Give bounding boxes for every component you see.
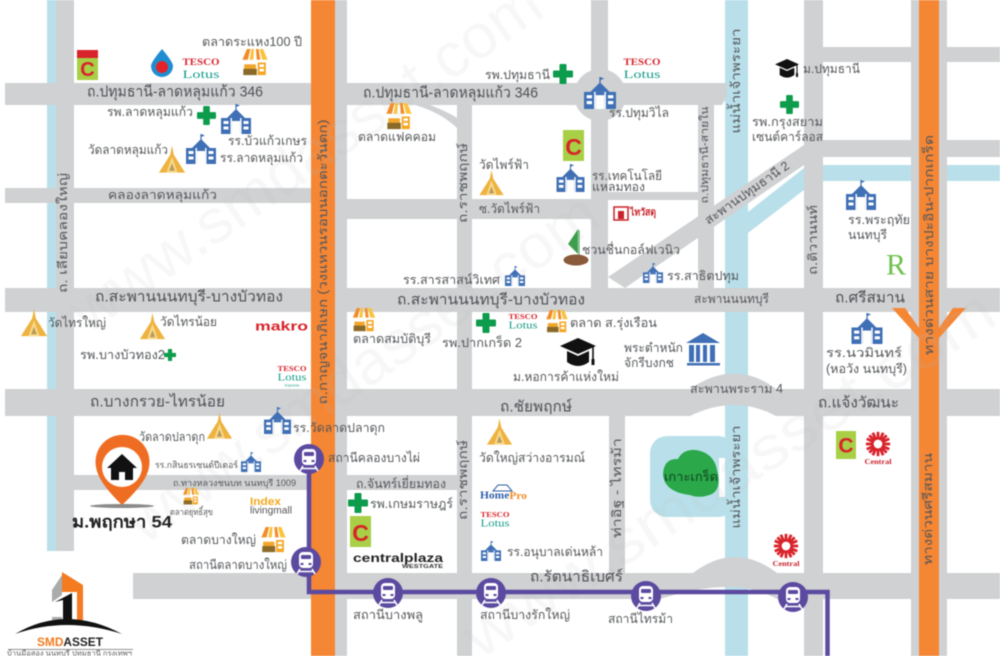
- label: Pathum Thani road west: ถ.ปทุมธานี-ลาดหลุมแก้ว 346: [87, 84, 263, 102]
- station: Bang Phlu: สถานีบางพลู: [353, 608, 423, 623]
- label: Bang Bua Thong road east: ถ.สะพานนนทบุรี-บางบัวทอง: [397, 292, 585, 310]
- Big C logo: C: [352, 520, 369, 546]
- market Yutthisuk: ตลาดยุทธิ์สุข: [170, 505, 213, 518]
- label: Chao Phraya lower vertical: แม่น้ำเจ้าพระยา: [726, 426, 743, 528]
- market 100 years: [202, 35, 302, 75]
- hospital Pak Kret 2: [442, 313, 522, 350]
- station: Sai Ma: [608, 581, 673, 626]
- school Pathum Wilai: [584, 77, 669, 121]
- Central logo: Central: [772, 560, 800, 568]
- market Rungruang: ตลาด ส.รุ่งเรือน: [570, 316, 657, 331]
- label: Bang Bua Thong road west: ถ.สะพานนนทบุรี-บางบัวทอง: [95, 288, 283, 306]
- school Satit Pathum: รร.สาธิตปทุม: [667, 269, 739, 284]
- royal residence Chakri Bongkot: [624, 333, 720, 370]
- Big C mini logo: C: [80, 59, 95, 81]
- hospital Pathum Thani: รพ.ปทุมธานี: [485, 68, 550, 83]
- Central logo: [772, 534, 800, 568]
- Big C logo: [350, 516, 371, 547]
- label: Chao Phraya upper vertical: แม่น้ำเจ้าพระยา: [726, 28, 743, 134]
- hospital Pathum Thani: [485, 64, 573, 84]
- hospital Kasemrad: [348, 493, 453, 513]
- market Sombat Buri: ตลาดสมบัติบุรี: [353, 332, 431, 347]
- school Sacred Heart Nonthaburi: [846, 180, 910, 243]
- landmarks: bottom left quadrant: [7, 407, 385, 656]
- temple Phrai Fa: [479, 158, 529, 195]
- label: Tha It Sai Ma vertical: ท่าอิฐ - ไทรม้า: [610, 438, 624, 538]
- school Nawamin: [826, 313, 907, 377]
- station: Bang Phlu: [353, 578, 423, 623]
- temple Sai Yai: [21, 309, 106, 336]
- temple Yai Sawang Arom: วัดใหญ่สว่างอารมณ์: [479, 451, 585, 465]
- label: canal Lat Lum Kaeo: คลองลาดหลุมแก้ว: [108, 188, 217, 203]
- project name: ม.พฤกษา 54: [72, 512, 173, 532]
- train stations: [189, 444, 808, 626]
- school Satit Pathum: [643, 263, 739, 284]
- golf course Chuan Chuen: [564, 229, 680, 266]
- school Wat Lat Pla Duk: [264, 407, 385, 436]
- school Sacred Heart Nonthaburi: นนทบุรี: [848, 228, 887, 243]
- temple Lat Pla Duk: วัดลาดปลาดุก: [139, 430, 205, 445]
- label: Si Saman road: ถ.ศรีสมาน: [835, 290, 905, 306]
- hospital Pak Kret 2: รพ.ปากเกร็ด 2: [442, 335, 522, 350]
- golf course Chuan Chuen: ชวนชื่นกอล์ฟเวนิว: [582, 241, 680, 257]
- station: Phra Nang Klao: [778, 582, 808, 612]
- Index Livingmall logo: Index: [250, 496, 282, 508]
- Tesco Lotus Express logo: Lotus: [278, 372, 307, 384]
- Robinson logo: R: [886, 248, 906, 282]
- royal residence Chakri Bongkot: พระตำหนัก: [624, 341, 683, 355]
- expressway: Bang Pa-in Pak Kret orange band with junction: [892, 0, 966, 656]
- Index Livingmall logo: livingmall: [250, 506, 292, 516]
- watermark: www.smdasset.com: www.smdasset.com: [113, 179, 612, 557]
- market Factory Mall: ตลาดแฟคคอม: [358, 130, 436, 144]
- Tesco Lotus Express logo: [508, 313, 538, 332]
- Big C logo: C: [838, 434, 854, 458]
- island: Koh Kret: [663, 450, 719, 497]
- landmarks: centre quadrant: [348, 57, 739, 570]
- HomePro logo: Home Pro: [480, 490, 527, 502]
- road labels: [56, 28, 936, 586]
- hospital Krung Siam St Carlos: รพ.กรุงสยาม: [752, 115, 823, 130]
- temple Yai Sawang Arom: [479, 418, 585, 465]
- market Factory Mall: [358, 103, 436, 144]
- Big C logo: [836, 431, 856, 459]
- hospital Krung Siam St Carlos: [752, 95, 823, 144]
- Tesco Lotus Express logo: Lotus: [480, 518, 510, 530]
- label: Chaeng Watthana road: ถ.แจ้งวัฒนะ: [818, 394, 899, 412]
- Tesco Lotus Express logo: [480, 511, 510, 530]
- temple Lat Lum Kaeo: วัดลาดหลุมแก้ว: [88, 143, 168, 158]
- school Pathum Wilai: รร.ปทุมวิไล: [609, 106, 669, 121]
- school Lat Lum Kaeo: รร.ลาดหลุมแก้ว: [220, 151, 303, 166]
- school Nawamin: รร.นวมินทร์: [826, 346, 902, 360]
- school Lat Lum Kaeo: [186, 134, 303, 166]
- school Kasintorn St Peter: รร.กสินธรเซนต์ปีเตอร์: [155, 459, 238, 470]
- label: Kanchanaphisek vertical: ถ.กาญจนาภิเษก (วงแหวนรอบนอกตะวันตก): [316, 120, 330, 404]
- new UTCC campus: ม.หอการค้าแห่งใหม่: [513, 370, 619, 384]
- school Bua Kaeo Kaset: รร.บัวแก้วเกษร: [228, 134, 307, 148]
- Tesco Lotus logo: Lotus: [624, 67, 661, 81]
- label: Tiwanon road vertical: ถ.ติวานนท์: [806, 205, 820, 275]
- market Bang Yai: ตลาดบางใหญ่: [181, 533, 256, 547]
- Index Livingmall logo: [250, 496, 292, 516]
- school Anuban Den La: [481, 541, 603, 561]
- SMD Asset logo: [7, 572, 133, 656]
- Tesco Lotus logo: [182, 57, 220, 81]
- Tesco Lotus Express logo: TESCO: [278, 365, 307, 373]
- PTT logo: [151, 49, 173, 77]
- Thai Watsadu logo: [613, 206, 657, 221]
- Tesco Lotus Express logo: TESCO: [508, 313, 538, 321]
- icon: museum: [686, 333, 720, 366]
- Tesco Lotus Express logo: Lotus: [508, 320, 538, 332]
- SMD Asset logo: SMDASSET: [37, 635, 104, 649]
- school Nawamin: (หอวัง นนทบุรี): [826, 362, 907, 377]
- school Sacred Heart Nonthaburi: รร.พระฤทัย: [848, 213, 910, 227]
- Central logo: [864, 432, 892, 466]
- school Sarasas Witaed: [403, 266, 525, 287]
- school Bua Kaeo Kaset: [221, 104, 307, 148]
- Tesco Lotus Express logo: [278, 365, 307, 388]
- station: Sai Ma: สถานีไทรม้า: [608, 612, 673, 626]
- label: Nonthaburi bridge: สะพานนนทบุรี: [694, 292, 769, 307]
- hospital Lat Lum Kaeo: [107, 105, 216, 125]
- school Kasintorn St Peter: [155, 452, 261, 472]
- label: Pathum Thani bridge 2 diagonal: สะพานปทุมธานี 2: [702, 159, 793, 228]
- label: Ratchaphruek lower vertical: ถ.ราชพฤกษ์: [456, 440, 470, 520]
- label: highway 1009: ถ.ทางหลวงชนบท นนทบุรี 1009: [173, 478, 296, 489]
- royal residence Chakri Bongkot: จักรีบงกช: [624, 356, 674, 370]
- temple Lat Pla Duk: [139, 412, 232, 445]
- station: Talat Bang Yai: สถานีตลาดบางใหญ่: [189, 558, 287, 572]
- label: Si Saman expressway vertical: ทางด่วนศรีสมาน: [921, 452, 935, 565]
- school Laem Thong: แหลมทอง: [592, 180, 645, 194]
- school Laem Thong: [556, 164, 662, 194]
- temple Sai Yai: วัดไทรใหญ่: [48, 316, 106, 330]
- label: Pathum Thani Sai Nai vertical: ถ.ปทุมธานี-สายใน: [698, 106, 711, 204]
- label: Chan Yiam Thong road: ถ.จันทร์เยี่ยมทอง: [356, 475, 446, 491]
- market Rungruang: [546, 310, 657, 332]
- station: Bang Rak Yai: [476, 578, 570, 622]
- Thai Watsadu logo: ไทวัสดุ: [629, 206, 656, 218]
- CentralPlaza Westgate logo: WESTGATE: [402, 564, 444, 570]
- island: Koh Kret: เกาะเกร็ด: [664, 469, 718, 484]
- school Wat Lat Pla Duk: รร.วัดลาดปลาดุก: [293, 421, 385, 436]
- market Bang Yai: [181, 527, 286, 552]
- CentralPlaza Westgate logo: centralplaza: [353, 551, 443, 565]
- label: Chaiyaphruek road: ถ.ชัยพฤกษ์: [500, 398, 572, 416]
- school Sarasas Witaed: รร.สารสาสน์วิเทศ: [403, 273, 500, 287]
- market Yutthisuk: [170, 488, 213, 518]
- landmarks: right side: [752, 59, 910, 568]
- label: Soi Wat Phrai Fa: ซ.วัดไพร์ฟ้า: [479, 202, 540, 216]
- market Sombat Buri: [353, 308, 431, 347]
- Central logo: Central: [864, 458, 892, 466]
- Tesco Lotus Express logo: Express: [285, 382, 299, 388]
- label: Ratanathibet road: ถ.รัตนาธิเบศร์: [530, 568, 623, 586]
- Tesco Lotus logo: TESCO: [624, 57, 660, 67]
- Tesco Lotus logo: [624, 57, 661, 81]
- hospital Lat Lum Kaeo: รพ.ลาดหลุมแก้ว: [107, 105, 193, 120]
- label: Pathum Thani road east: ถ.ปทุมธานี-ลาดหลุมแก้ว 346: [363, 84, 538, 102]
- expressway: Kanchanaphisek orange band: [311, 0, 335, 656]
- station: Talat Bang Yai: [189, 547, 321, 577]
- purple rail line: [309, 460, 828, 656]
- hospital Krung Siam St Carlos: เซนต์คาร์ลอส: [752, 130, 823, 144]
- station: Khlong Bang Phai: [294, 444, 420, 474]
- Pathum Thani University: [775, 59, 860, 78]
- hospital Kasemrad: รพ.เกษมราษฎร์: [370, 497, 453, 511]
- Pathum Thani University: ม.ปทุมธานี: [803, 62, 860, 77]
- temple Sai Noi: วัดไทรน้อย: [160, 315, 217, 329]
- label: Liap Khlong Yai road vertical: ถ. เลียบคลองใหญ่: [56, 173, 70, 293]
- school Anuban Den La: รร.อนุบาลเด่นหล้า: [507, 545, 603, 560]
- Big C mini logo: [77, 50, 98, 81]
- location pin: Pruksa 54: [72, 435, 173, 532]
- landmarks: top left quadrant: [21, 35, 308, 388]
- temple Sai Noi: [140, 313, 217, 339]
- temple Phrai Fa: วัดไพร์ฟ้า: [479, 158, 529, 172]
- label: Rama 4 bridge: สะพานพระราม 4: [690, 382, 783, 396]
- Big C logo: C: [565, 134, 582, 160]
- CentralPlaza Westgate logo: [353, 551, 444, 570]
- market 100 years: ตลาดระแหง100 ปี: [202, 35, 302, 49]
- label: Bang Pa-in expressway vertical: ทางด่วนสาย บางปะอิน-ปากเกร็ด: [921, 135, 936, 355]
- Tesco Lotus logo: TESCO: [182, 57, 220, 67]
- HomePro logo: [480, 485, 527, 502]
- Tesco Lotus Express logo: TESCO: [480, 511, 510, 519]
- hospital Bang Bua Thong 2: รพ.บางบัวทอง2: [80, 348, 165, 362]
- station: Khlong Bang Phai: สถานีคลองบางไผ่: [328, 451, 420, 465]
- label: Ratchaphruek upper vertical: ถ.ราชพฤกษ์: [456, 143, 470, 223]
- new UTCC campus: [513, 338, 619, 384]
- school Laem Thong: รร.เทคโนโลยี: [592, 168, 662, 183]
- Tesco Lotus logo: Lotus: [182, 67, 220, 81]
- Makro logo: makro: [255, 318, 308, 334]
- temple Lat Lum Kaeo: [88, 143, 185, 173]
- Big C logo: [563, 130, 584, 161]
- station: Bang Rak Yai: สถานีบางรักใหญ่: [480, 608, 570, 622]
- label: Bang Kruai Sai Noi road: ถ.บางกรวย-ไทรน้อย: [90, 392, 225, 410]
